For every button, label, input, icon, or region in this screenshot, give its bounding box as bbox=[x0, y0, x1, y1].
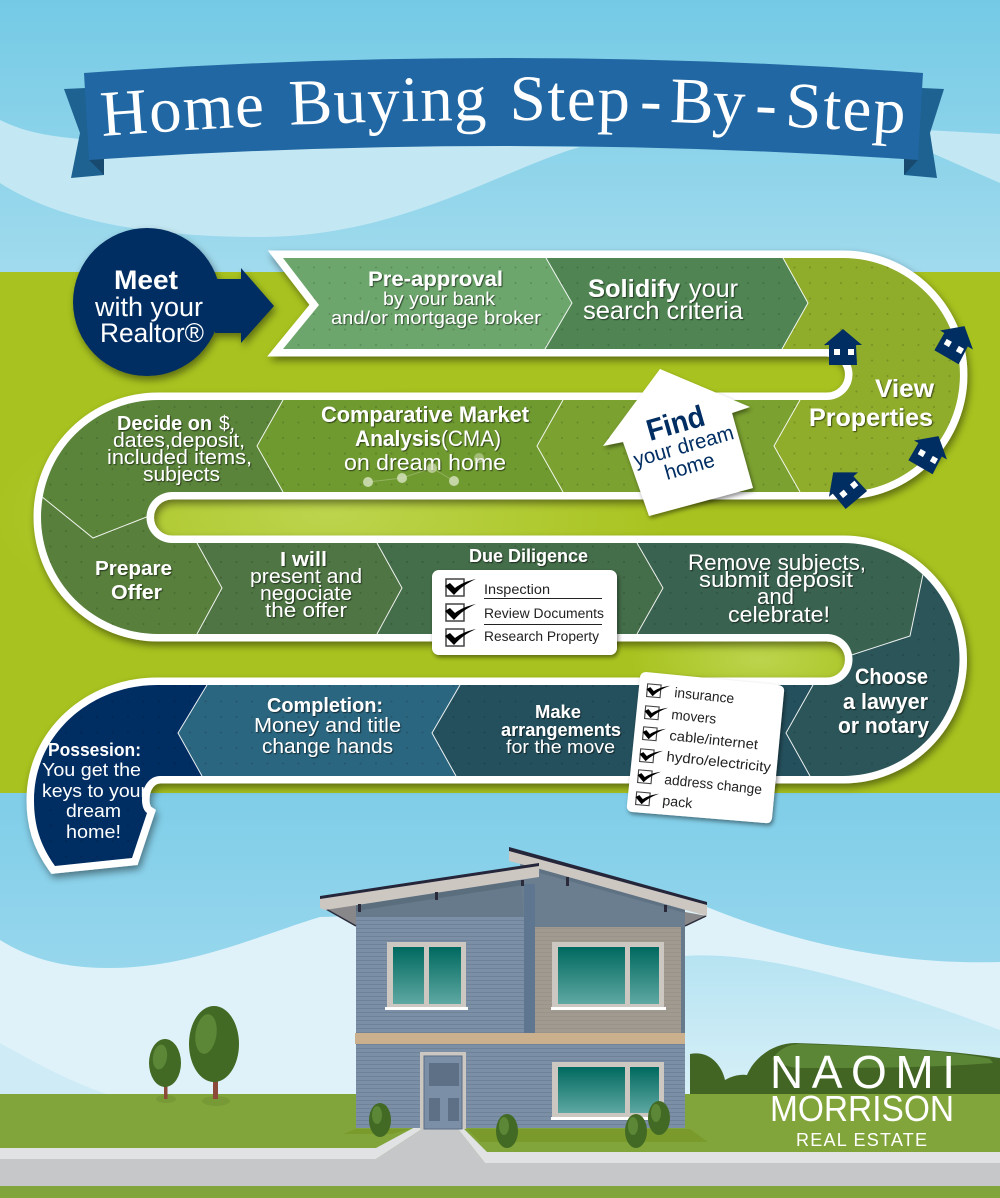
logo: Naomi Morrison Real Estate: MORRISON bbox=[770, 1088, 954, 1129]
text: view properties: View bbox=[875, 375, 935, 403]
text: decide on: dates,deposit, bbox=[113, 430, 245, 452]
text: present offer: I will bbox=[280, 549, 327, 571]
text: remove subjects: celebrate! bbox=[728, 602, 830, 627]
segment: find home bbox=[537, 400, 800, 492]
text: prepare offer: Offer bbox=[111, 582, 162, 604]
track outline bbox=[34, 258, 960, 866]
card: moving checklist: address change bbox=[664, 771, 763, 797]
text: solidify bbox=[583, 275, 743, 325]
text: completion: Money and title bbox=[254, 715, 401, 737]
text: comparative market analysis: (CMA) bbox=[441, 426, 501, 451]
text: possession: home! bbox=[66, 822, 121, 842]
segment: completion bbox=[178, 685, 460, 776]
ground, sidewalk and road bbox=[0, 1094, 1000, 1198]
track segments bbox=[20, 258, 980, 880]
step 0: meet with your realtor bbox=[73, 228, 274, 376]
card: moving checklist: pack bbox=[662, 792, 694, 811]
card: due diligence checklist: Research Property bbox=[484, 629, 599, 644]
house: lawn beds bbox=[343, 1129, 708, 1142]
segment: prepare offer bbox=[41, 498, 222, 634]
text: completion: Completion: bbox=[267, 695, 383, 717]
house bbox=[320, 847, 708, 1148]
callout: find your dream home bbox=[603, 369, 753, 516]
segment: solidify bbox=[545, 258, 808, 349]
house: upper right window bbox=[551, 942, 666, 1010]
text: pre-approval: by your bank bbox=[383, 289, 496, 309]
house: upper left window bbox=[385, 942, 468, 1010]
segment: arrangements bbox=[432, 685, 813, 776]
segment: possession bbox=[34, 685, 207, 866]
segment: choose lawyer bbox=[786, 575, 960, 776]
text: choose lawyer: Choose bbox=[855, 664, 928, 689]
segment: comparative market analysis bbox=[257, 400, 563, 492]
text: comparative market analysis: on dream home bbox=[344, 450, 506, 475]
text: solidify: your bbox=[689, 275, 738, 303]
segment: pre-approval bbox=[260, 258, 572, 349]
tree: small bbox=[149, 1039, 181, 1103]
house: roof bbox=[320, 847, 707, 926]
text: solidify: search criteria bbox=[583, 297, 743, 325]
title: Home Buying Step-By-Step bbox=[100, 77, 903, 146]
callout: find your dream home: home bbox=[662, 449, 717, 485]
card: due diligence checklist: Inspection bbox=[484, 582, 550, 597]
text: pre-approval: and/or mortgage broker bbox=[331, 308, 541, 328]
text: choose lawyer bbox=[838, 664, 930, 738]
logo: Naomi Morrison Real Estate: NAOMI bbox=[770, 1046, 955, 1098]
background: green band bbox=[0, 272, 1000, 793]
segment: remove subjects bbox=[637, 543, 926, 663]
text: remove subjects: submit deposit bbox=[699, 567, 853, 592]
decorative dots under CMA bbox=[363, 453, 484, 487]
card: due diligence checklist: Review Documents bbox=[484, 606, 604, 621]
text: prepare offer bbox=[95, 558, 172, 604]
text: comparative market analysis: Analysis bbox=[355, 426, 441, 451]
logo: Naomi Morrison Real Estate: REAL ESTATE bbox=[796, 1130, 927, 1150]
text: completion: change hands bbox=[262, 736, 393, 758]
step 0: meet with your realtor: Realtor® bbox=[100, 318, 204, 348]
icon: house lower right bbox=[904, 427, 955, 477]
card: moving checklist: cable/internet bbox=[669, 727, 759, 752]
text: decide on bbox=[107, 413, 252, 486]
segment: decide bbox=[20, 400, 283, 538]
icon: house on track bbox=[824, 329, 862, 365]
text: decide on: $, bbox=[219, 413, 235, 435]
background: lower sky bbox=[0, 793, 1000, 1098]
text: comparative market analysis bbox=[321, 402, 530, 475]
text: remove subjects bbox=[688, 550, 866, 627]
text: completion bbox=[254, 695, 401, 758]
title banner bbox=[64, 58, 944, 178]
house: door bbox=[420, 1052, 466, 1129]
text: remove subjects: and bbox=[757, 584, 794, 609]
card: due diligence checklist bbox=[432, 570, 617, 655]
text: choose lawyer: or notary bbox=[838, 713, 930, 738]
callout: find your dream home: your dream bbox=[631, 421, 736, 472]
text: possession: keys to your bbox=[42, 781, 147, 801]
icon: house bottom bbox=[819, 460, 871, 512]
card: moving checklist: movers bbox=[671, 706, 717, 727]
icon: house top right bbox=[930, 317, 981, 367]
house: walls bbox=[355, 862, 685, 1128]
text: make arrangements: for the move bbox=[506, 737, 615, 757]
step 0: meet with your realtor: with your bbox=[94, 292, 203, 322]
text: pre-approval: Pre-approval bbox=[368, 268, 503, 291]
text: choose lawyer: a lawyer bbox=[843, 689, 928, 714]
text: remove subjects: Remove subjects, bbox=[688, 550, 866, 575]
text: possession: Possesion: bbox=[48, 740, 141, 760]
house: lower window bbox=[551, 1062, 666, 1120]
text: make arrangements bbox=[501, 702, 621, 757]
text: decide on: subjects bbox=[143, 464, 220, 486]
card: moving checklist: insurance bbox=[674, 684, 735, 706]
text: prepare offer: Prepare bbox=[95, 558, 172, 580]
hedge behind logo bbox=[690, 1043, 1000, 1094]
text: view properties bbox=[809, 375, 935, 432]
step 0: meet with your realtor: Meet bbox=[114, 265, 178, 295]
segment: view properties bbox=[774, 258, 980, 492]
text: comparative market analysis: Comparative Market bbox=[321, 402, 530, 427]
text: possession: dream bbox=[66, 801, 121, 821]
text: possession: You get the bbox=[42, 760, 141, 780]
card: moving checklist: hydro/electricity bbox=[666, 748, 772, 775]
text: pre-approval bbox=[331, 268, 541, 328]
text: present offer bbox=[250, 549, 362, 622]
text: make arrangements: arrangements bbox=[501, 720, 621, 740]
tree: large bbox=[189, 1006, 239, 1106]
text: possession bbox=[42, 740, 147, 842]
text: present offer: negociate bbox=[260, 583, 352, 605]
text: view properties: Properties bbox=[809, 404, 933, 432]
background: sky top bbox=[0, 0, 1000, 280]
text: present offer: present and bbox=[250, 566, 362, 588]
logo: Naomi Morrison Real Estate bbox=[770, 1046, 955, 1150]
text: make arrangements: Make bbox=[535, 702, 581, 722]
text: due diligence: Due Diligence bbox=[469, 546, 588, 566]
card: moving checklist bbox=[627, 672, 784, 823]
text: decide on: included items, bbox=[107, 447, 252, 469]
segment: present bbox=[197, 543, 402, 634]
text: present offer: the offer bbox=[265, 600, 347, 622]
text: solidify: Solidify bbox=[588, 275, 680, 303]
house: shrubs bbox=[369, 1101, 670, 1148]
callout: find your dream home: Find bbox=[643, 400, 709, 448]
text: decide on: Decide on bbox=[117, 413, 212, 435]
segment: due diligence bbox=[377, 543, 663, 634]
